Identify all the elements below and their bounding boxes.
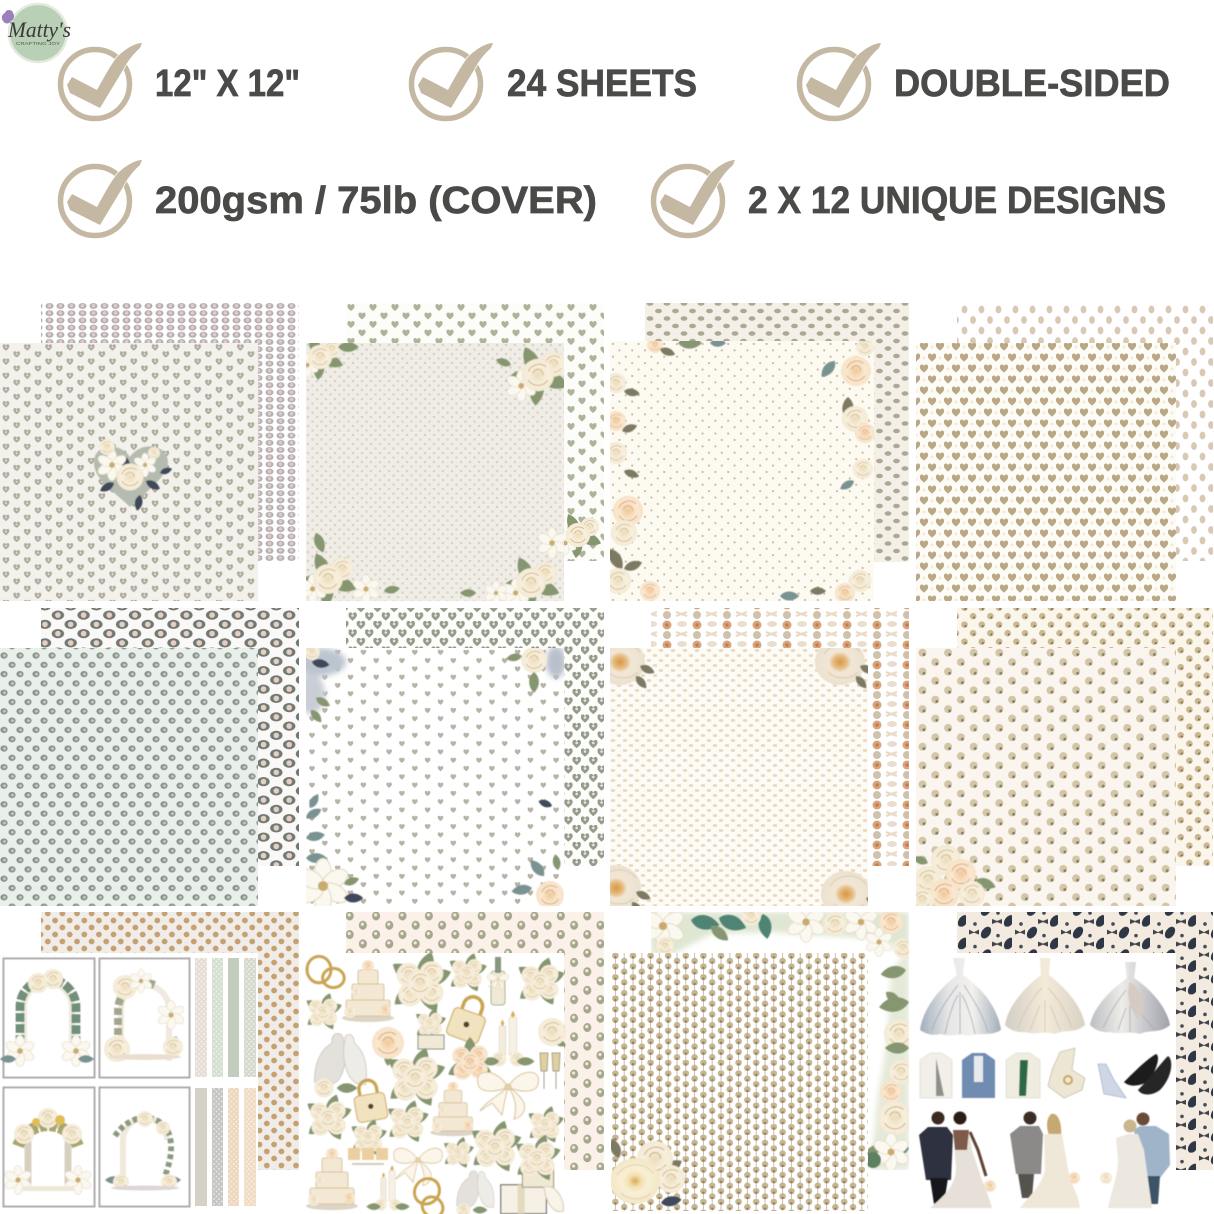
feature text: double-sided: DOUBLE-SIDED [894,63,1170,105]
panel: paper 10 wedding stickers [304,912,604,1214]
panel: paper 4 heart pattern [916,303,1213,601]
panel: paper 5 sage hearts [0,608,299,906]
logo: CRAFTING JOY [16,41,60,46]
panel: paper 1 heart bouquet [0,303,299,601]
panel: paper 7 peach florals [591,608,909,923]
card: green arch [0,958,94,1078]
panel: paper 12 dresses and couples [916,912,1213,1211]
card: yellow arch [3,1088,94,1206]
logo [2,4,71,62]
panel: paper 11 floral border [607,902,914,1211]
suits and shoes [920,1048,1171,1098]
feature text: sheets: 24 SHEETS [507,63,697,105]
panel: paper 8 bouquet tile [910,608,1213,912]
strips [195,958,256,1206]
logo: Matty's [7,17,71,42]
dresses [920,958,1170,1036]
card: slim arch [100,1088,190,1206]
icon: check 12x12 [60,43,142,118]
panel: paper 6 white hearts florals [294,608,604,914]
card: cream arch [100,958,190,1078]
icon: check weight [60,160,142,236]
feature text: weight: 200gsm / 75lb (COVER) [155,180,597,222]
icon: check designs [654,160,735,236]
panel: paper 2 floral corners [295,303,604,612]
icon: check double-sided [800,43,881,118]
feature text: designs: 2 X 12 UNIQUE DESIGNS [748,180,1166,222]
feature text: size: 12" X 12" [155,63,300,105]
icon: check sheets [412,43,493,118]
panel: paper 3 floral garland [605,303,909,603]
couples [919,1112,1170,1208]
panel: paper 9 arch cards [0,912,299,1211]
